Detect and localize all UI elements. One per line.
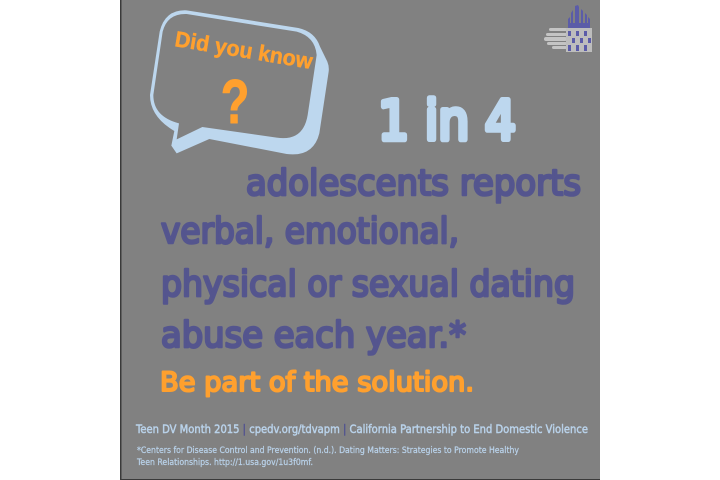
- footer line: Teen DV Month 2015 | cpedv.org/tdvapm | California Partnership to End Domestic Violence: [135, 422, 588, 436]
- bubble heading: Did you know: Did you know: [173, 26, 315, 74]
- bubble question mark: ?: [221, 67, 249, 137]
- main statement: abuse each year.*: [161, 315, 466, 356]
- main statement: adolescents reports: [246, 163, 581, 204]
- citation: *Centers for Disease Control and Prevention. (n.d.). Dating Matters: Strategies to Promote Healthy: [137, 446, 520, 456]
- main statement: physical or sexual dating: [161, 264, 575, 305]
- main statement: verbal, emotional,: [161, 211, 459, 252]
- logo: [544, 5, 592, 52]
- call to action: Be part of the solution.: [160, 367, 474, 398]
- statistic: 1 in 4: 1 in 4: [378, 90, 516, 152]
- speech bubble: [150, 10, 329, 154]
- main statement: [161, 163, 581, 356]
- citation: [136, 446, 520, 468]
- citation: Teen Relationships. http://1.usa.gov/1u3f0mf.: [136, 458, 313, 468]
